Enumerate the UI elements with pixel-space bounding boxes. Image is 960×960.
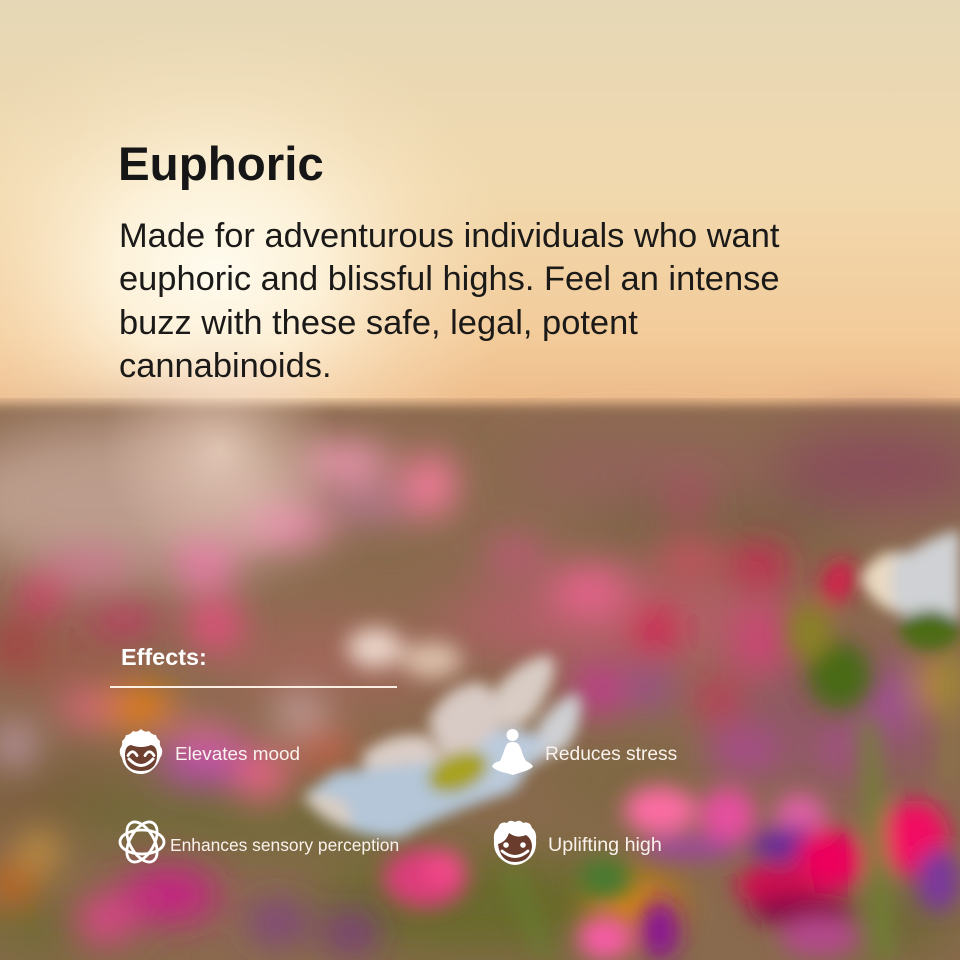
description text block: cannabinoids. [119, 347, 332, 385]
icon: meditating figure [492, 729, 533, 775]
effect: uplifting high [494, 820, 662, 865]
effect: reduces stress [492, 729, 677, 775]
effects divider line [110, 686, 397, 688]
icon: atom [118, 820, 166, 864]
effects heading: Effects: [121, 644, 207, 670]
icon: smiling face with curly hair [494, 820, 536, 865]
title: Euphoric [118, 138, 324, 191]
description text block: euphoric and blissful highs. Feel an intense [119, 260, 779, 298]
effect: elevates mood [120, 729, 300, 774]
label: Reduces stress [545, 744, 677, 765]
right white flower [860, 530, 960, 618]
label: Elevates mood [175, 744, 300, 765]
description text block: Made for adventurous individuals who want [119, 217, 779, 255]
field base [0, 404, 960, 464]
icon: smiling face with wavy hair [120, 729, 162, 774]
effect: enhances sensory perception [118, 820, 399, 864]
lower petals [305, 756, 526, 838]
back petals [495, 656, 554, 727]
label: Uplifting high [548, 834, 662, 856]
label: Enhances sensory perception [170, 835, 399, 855]
description text block: buzz with these safe, legal, potent [119, 304, 638, 342]
description text block [119, 217, 780, 385]
